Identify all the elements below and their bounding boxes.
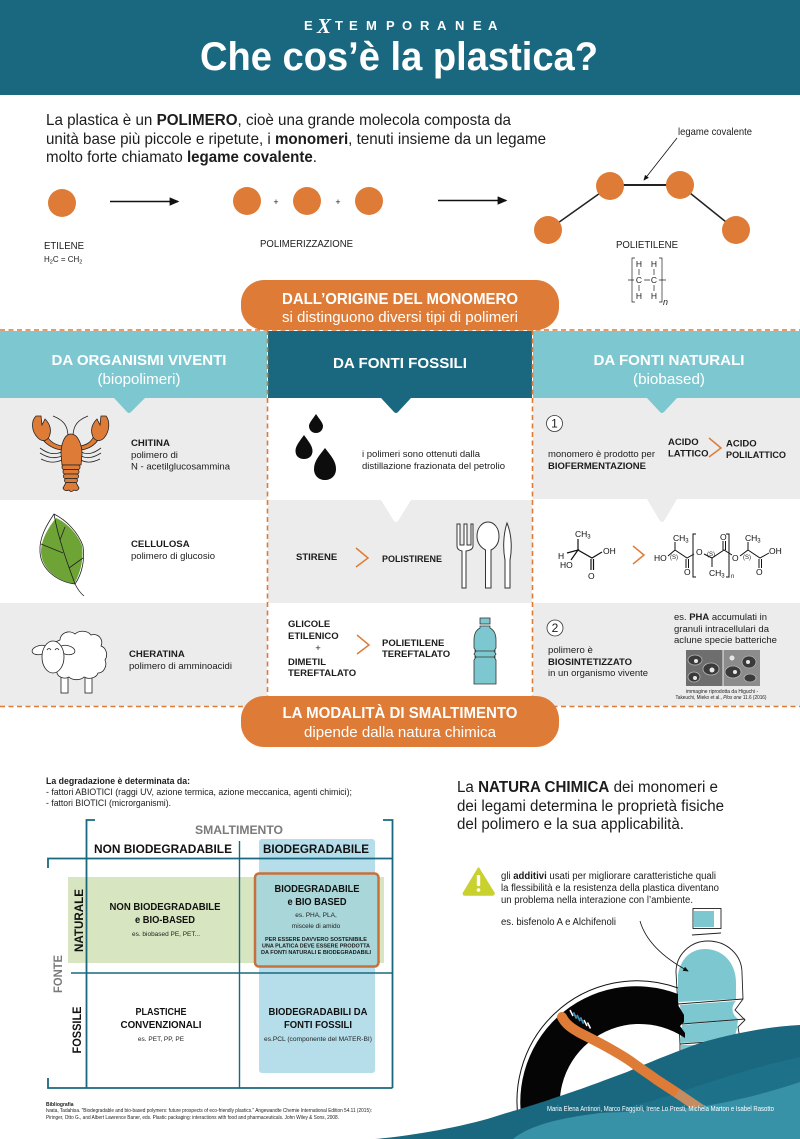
chemical structure: acido polilattico: CH — [673, 533, 685, 543]
image caption: Takeuchi, Mieko et al., Plos one 11.6 (2016) — [676, 695, 767, 701]
text block: additivi — [501, 871, 719, 928]
glicole etilenico and dimetil tereftalato to PET: ETILENICO — [288, 631, 339, 642]
cell: biodegradabile e bio based: BIODEGRADABILE — [274, 884, 360, 895]
cell: biodegradabili da fonti fossili: es.PCL (componente del MATER-BI) — [264, 1036, 372, 1043]
chemical structure: acido lattico: CH — [575, 529, 587, 539]
cell: biodegradabili da fonti fossili — [264, 1007, 372, 1043]
text: cellulosa: polimero di glucosio — [131, 551, 215, 562]
polietilene formula: H — [651, 291, 657, 301]
text: PHA — [674, 612, 777, 646]
chemical structure: acido lattico: 3 — [587, 534, 591, 540]
chemical structure: acido polilattico: (S) — [707, 552, 715, 558]
polietilene formula — [628, 258, 668, 307]
text: petrolio: distillazione frazionata del petrolio — [362, 461, 505, 472]
text block: degradazione: - fattori ABIOTICI (raggi UV, azione termica, azione meccanica, agenti chimici); — [46, 787, 352, 798]
icon: warning triangle — [463, 868, 494, 895]
glicole etilenico and dimetil tereftalato to PET — [288, 619, 450, 679]
step 1 biofermentazione — [546, 416, 786, 472]
step 1 biofermentazione: BIOFERMENTAZIONE — [548, 461, 647, 472]
step 1 biofermentazione: 1 — [551, 416, 558, 430]
legame covalente label and arrow: legame covalente — [678, 126, 752, 138]
monomer: etilene: ETILENE — [44, 240, 84, 252]
axis label: smaltimento: SMALTIMENTO — [195, 823, 283, 837]
polietilene formula: H — [636, 259, 642, 269]
chemical structure: acido polilattico: (S) — [743, 555, 751, 561]
step 1 biofermentazione: monomero è prodotto per — [548, 449, 656, 460]
text block: degradazione — [46, 776, 352, 809]
polimerizzazione monomers: + — [335, 197, 341, 207]
text block: degradazione: La degradazione è determinata da: — [46, 776, 190, 787]
polymerization diagram — [44, 126, 752, 307]
chemical structure: acido polilattico: (S) — [670, 555, 678, 561]
orange pill heading: modalita di smaltimento: LA MODALITÀ DI SMALTIMENTO — [282, 705, 518, 722]
row label: naturale: NATURALE — [72, 889, 86, 952]
cell: non biodegradabile e bio-based: es. biobased PE, PET... — [132, 931, 200, 938]
column header: da fonti naturali: (biobased) — [633, 372, 705, 388]
text: cheratina: polimero di amminoacidi — [129, 661, 232, 672]
monomer: etilene: H — [44, 255, 50, 264]
chemical structure: acido polilattico: O — [720, 532, 727, 542]
bibliography: Piringer, Otto G., and Albert Lawrence Baner, eds. Plastic packaging: interactions with food and pharmaceuticals. John Wiley & Sons, 2008. — [46, 1115, 339, 1121]
chemical structure: acido polilattico: 3 — [757, 538, 761, 544]
arrow — [110, 200, 178, 202]
arrow — [438, 200, 506, 202]
orange pill heading: modalita di smaltimento: dipende dalla natura chimica — [304, 724, 497, 741]
cell: plastiche convenzionali: es. PET, PP, PE — [138, 1036, 185, 1043]
matrix chart: smaltimento vs fonte — [48, 820, 392, 1088]
orange pill heading: origine del monomero — [241, 280, 559, 330]
column label: non biodegradabile: NON BIODEGRADABILE — [94, 842, 232, 856]
cell: plastiche convenzionali: CONVENZIONALI — [120, 1020, 202, 1031]
header banner — [0, 0, 800, 95]
chemical structure: acido polilattico — [654, 532, 782, 580]
highlighted cell — [255, 874, 378, 966]
stirene to polistirene — [296, 548, 442, 567]
cell: biodegradabile e bio based: es. PHA, PLA, — [295, 912, 337, 919]
cell: non biodegradabile e bio-based — [110, 902, 221, 938]
polimerizzazione monomers: + — [273, 197, 279, 207]
column header: da fonti naturali — [533, 331, 800, 413]
intro text block: molto forte chiamato legame covalente. — [46, 149, 317, 166]
column label: biodegradabile: BIODEGRADABILE — [263, 842, 369, 856]
text: chitina: N - acetilglucosammina — [131, 462, 231, 472]
text block: additivi: un problema nella interazione con l’ambiente. — [501, 895, 693, 906]
chemical structure: acido lattico: H — [558, 551, 564, 561]
polietilene chain — [534, 171, 750, 251]
brand name: Extemporanea: X — [316, 14, 332, 38]
step 1 biofermentazione: ACIDO — [668, 437, 699, 448]
light wave — [513, 1082, 800, 1139]
step 2 biosintetizzato: BIOSINTETIZZATO — [548, 657, 633, 668]
chemical structure: acido polilattico: O — [696, 547, 703, 557]
dashed section dividers — [0, 330, 800, 706]
bottle — [676, 908, 745, 1075]
text block: additivi: es. bisfenolo A e Alchifenoli — [501, 917, 616, 928]
text: chitina: CHITINA — [131, 438, 170, 449]
axis label: fonte: FONTE — [51, 955, 65, 993]
cell: biodegradabili da fonti fossili: BIODEGRADABILI DA — [268, 1007, 368, 1018]
glicole etilenico and dimetil tereftalato to PET: + — [315, 643, 321, 654]
chemical structure: acido polilattico: n — [731, 574, 734, 580]
monomer: etilene — [44, 189, 84, 266]
dark wave — [375, 1025, 800, 1139]
title: Che cos’è la plastica? — [200, 35, 598, 79]
cell: biodegradabile e bio based: miscele di amido — [292, 923, 341, 930]
glicole etilenico and dimetil tereftalato to PET: DIMETIL — [288, 657, 326, 668]
text: cellulosa: CELLULOSA — [131, 539, 190, 550]
icon: cutlery — [457, 522, 511, 588]
chemical structure: acido polilattico: O — [756, 567, 763, 577]
chemical structure: acido polilattico: O — [684, 567, 691, 577]
column header: da fonti naturali: DA FONTI NATURALI — [594, 352, 744, 369]
column header: da fonti fossili: DA FONTI FOSSILI — [333, 355, 467, 372]
text: PHA: granuli intracellulari da — [674, 624, 770, 635]
chemical structure: acido polilattico: O — [732, 553, 739, 563]
chemical structure: acido polilattico: 3 — [685, 538, 689, 544]
chemical structure: acido polilattico: CH — [745, 533, 757, 543]
step 2 biosintetizzato — [547, 620, 648, 679]
monomer: etilene: 2 — [50, 260, 53, 266]
chemical structure: acido polilattico: 3 — [721, 574, 725, 580]
column header: da fonti fossili — [268, 331, 532, 413]
column header: da organismi viventi: DA ORGANISMI VIVENTI — [52, 352, 226, 369]
glicole etilenico and dimetil tereftalato to PET: POLIETILENE — [382, 638, 444, 649]
orange pill heading: origine del monomero: si distinguono diversi tipi di polimeri — [282, 309, 518, 326]
text block: natura chimica: La NATURA CHIMICA dei monomeri e — [457, 779, 718, 796]
bibliography: Iwata, Tadahisa. "Biodegradable and bio-based polymers: future prospects of eco-friendly plastics." Angewandte Chemie International Edition 54.11 (2015): — [46, 1108, 372, 1114]
cell: biodegradabile e bio based: UNA PLATICA DEVE ESSERE PRODOTTA — [262, 944, 370, 950]
text: chitina: polimero di — [131, 450, 178, 461]
cell: biodegradabile e bio based: e BIO BASED — [288, 897, 346, 908]
step 2 biosintetizzato: 2 — [552, 621, 559, 635]
step 1 biofermentazione: ACIDO — [726, 438, 757, 450]
column header: da organismi viventi — [0, 331, 267, 413]
step 1 biofermentazione: LATTICO — [668, 448, 708, 460]
intro text block — [46, 112, 546, 166]
chemical structure: acido polilattico: CH — [709, 568, 721, 578]
polietilene formula: n — [663, 297, 668, 307]
black plastic ring — [517, 981, 685, 1135]
text: chitina — [131, 438, 231, 472]
image caption: immagine riprodotta da Higuchi - — [686, 689, 758, 695]
chemical structure: acido polilattico: HO — [654, 553, 667, 563]
brand name: Extemporanea: E — [304, 18, 313, 33]
row label: fossile: FOSSILE — [70, 1006, 84, 1054]
polimerizzazione monomers — [233, 187, 383, 250]
cell: biodegradabile e bio based — [261, 884, 372, 956]
bibliography: Bibliografia — [46, 1102, 74, 1108]
text block: additivi: gli additivi usati per migliorare caratteristiche quali — [501, 871, 716, 882]
cell: non biodegradabile e bio-based: NON BIODEGRADABILE — [110, 902, 221, 913]
chemical structure: acido lattico: O — [588, 571, 595, 581]
text: PHA: aclune specie batteriche — [674, 635, 777, 646]
micrograph of bacterial granules — [686, 650, 760, 686]
step 2 biosintetizzato: in un organismo vivente — [548, 668, 648, 679]
chevron — [633, 546, 644, 564]
polietilene formula: H — [651, 259, 657, 269]
stirene to polistirene: STIRENE — [296, 552, 337, 563]
illustration: ring, bottle, toothbrush — [375, 908, 800, 1139]
polietilene formula: C — [636, 275, 642, 285]
chemical structure: acido lattico: HO — [560, 560, 573, 570]
bibliography — [46, 1102, 372, 1121]
text block: natura chimica — [457, 779, 724, 833]
icon: leaf — [40, 514, 84, 596]
polietilene chain: POLIETILENE — [616, 239, 678, 251]
stirene to polistirene: POLISTIRENE — [382, 554, 442, 565]
chemical structure: acido polilattico: OH — [769, 546, 782, 556]
polietilene formula: H — [636, 291, 642, 301]
intro text block: unità base più piccole e ripetute, i monomeri, tenuti insieme da un legame — [46, 131, 546, 148]
polietilene formula: C — [651, 275, 657, 285]
cell: plastiche convenzionali — [120, 1007, 202, 1043]
text: cheratina: CHERATINA — [129, 649, 185, 660]
chemical structure: acido lattico: OH — [603, 546, 616, 556]
cell: biodegradabili da fonti fossili: FONTI FOSSILI — [284, 1020, 352, 1031]
chemical structure: acido lattico — [558, 529, 616, 581]
glicole etilenico and dimetil tereftalato to PET: TEREFTALATO — [288, 668, 356, 679]
polimerizzazione monomers: POLIMERIZZAZIONE — [260, 238, 353, 250]
icon: lobster — [32, 416, 109, 492]
icon: sheep — [31, 631, 107, 693]
text: petrolio: i polimeri sono ottenuti dalla — [362, 449, 481, 460]
icon: oil drops — [296, 414, 336, 480]
step 2 biosintetizzato: polimero è — [548, 645, 593, 656]
panel backgrounds — [0, 398, 800, 706]
text: cellulosa — [131, 539, 215, 562]
orange pill heading: modalita di smaltimento — [241, 696, 559, 747]
cell: plastiche convenzionali: PLASTICHE — [136, 1007, 187, 1018]
bottle pointer arrow — [640, 921, 688, 971]
icon: small bottle — [474, 618, 496, 684]
brand name: Extemporanea: TEMPORANEA — [335, 18, 498, 33]
intro text block: La plastica è un POLIMERO, cioè una grande molecola composta da — [46, 112, 511, 129]
monomer: etilene: C = CH — [53, 255, 80, 264]
cell: biodegradabile e bio based: PER ESSERE DAVVERO SOSTENIBILE — [265, 937, 368, 943]
monomer: etilene: 2 — [79, 260, 82, 266]
step 1 biofermentazione: POLILATTICO — [726, 450, 786, 461]
text block: natura chimica: del polimero e la sua applicabilità. — [457, 816, 684, 833]
middle wave — [590, 1057, 800, 1139]
orange pill heading: origine del monomero: DALL’ORIGINE DEL MONOMERO — [282, 291, 518, 308]
text block: additivi: la flessibilità e la resistenza della plastica diventano — [501, 883, 719, 894]
text: petrolio — [362, 449, 505, 472]
text: cheratina — [129, 649, 232, 672]
glicole etilenico and dimetil tereftalato to PET: TEREFTALATO — [382, 649, 450, 660]
column header: da organismi viventi: (biopolimeri) — [98, 372, 180, 388]
cell: non biodegradabile e bio-based: e BIO-BASED — [135, 915, 195, 926]
text block: degradazione: - fattori BIOTICI (microrganismi). — [46, 798, 171, 809]
glicole etilenico and dimetil tereftalato to PET: GLICOLE — [288, 619, 330, 630]
text: PHA: es. PHA accumulati in — [674, 612, 767, 623]
text block: natura chimica: dei legami determina le proprietà fisiche — [457, 798, 724, 815]
toothbrush — [562, 1010, 702, 1110]
image caption — [676, 689, 767, 701]
legame covalente label and arrow — [644, 126, 752, 180]
cell: biodegradabile e bio based: DA FONTI NATURALI E BIODEGRADABILI — [261, 950, 372, 956]
